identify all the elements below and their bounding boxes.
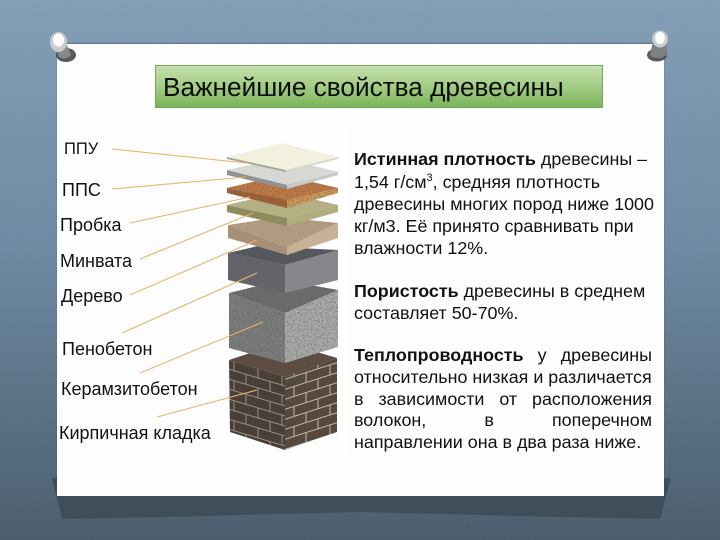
- title: [155, 65, 603, 108]
- label: Минвата: Минвата: [60, 251, 132, 271]
- text block: density: древесины многих пород ниже 1000: [354, 194, 654, 214]
- layer: cork: [227, 175, 338, 208]
- label: Керамзитобетон: Керамзитобетон: [61, 379, 198, 399]
- text block: thermal conductivity: в зависимости от расположения: [354, 389, 652, 409]
- layer: polyurethane foam: [227, 143, 338, 172]
- text block: density: Истинная плотность древесины –: [354, 149, 647, 169]
- white sheet panel: [57, 44, 664, 496]
- text block: thermal conductivity: волокон, в поперечном: [354, 410, 652, 430]
- text block: porosity: [354, 281, 645, 323]
- icon: right pin: [647, 30, 668, 62]
- text block: density: [354, 149, 654, 258]
- icon: left pin: [50, 32, 76, 62]
- label: Кирпичная кладка: Кирпичная кладка: [59, 423, 211, 443]
- text block: thermal conductivity: [354, 345, 652, 452]
- label: ППС: ППС: [62, 180, 101, 200]
- text block: thermal conductivity: относительно низкая и различается: [354, 367, 652, 387]
- text block: density: 1,54 г/см3, средняя плотность: [354, 172, 600, 192]
- layered wall materials stack: [227, 143, 338, 450]
- label: Пробка: Пробка: [60, 215, 122, 235]
- text block: thermal conductivity: направлении она в два раза ниже.: [354, 432, 641, 452]
- layer: brick: [229, 342, 337, 450]
- layer: wood: [228, 217, 338, 255]
- label: Пенобетон: Пенобетон: [62, 339, 152, 359]
- text block: porosity: Пористость древесины в среднем: [354, 281, 645, 301]
- title: Важнейшие свойства древесины: [163, 72, 564, 102]
- layer: foam concrete: [228, 246, 338, 293]
- label: Дерево: Дерево: [61, 286, 123, 306]
- text block: density: кг/м3. Её принято сравнивать при: [354, 216, 634, 236]
- text block: thermal conductivity: Теплопроводность у древесины: [354, 345, 652, 365]
- layer: mineral wool: [227, 192, 338, 226]
- text block: density: влажности 12%.: [354, 238, 488, 258]
- text block: porosity: составляет 50-70%.: [354, 303, 518, 323]
- label: ППУ: ППУ: [64, 140, 98, 158]
- layer: expanded clay concrete: [229, 280, 338, 363]
- layer: polystyrene: [227, 158, 338, 189]
